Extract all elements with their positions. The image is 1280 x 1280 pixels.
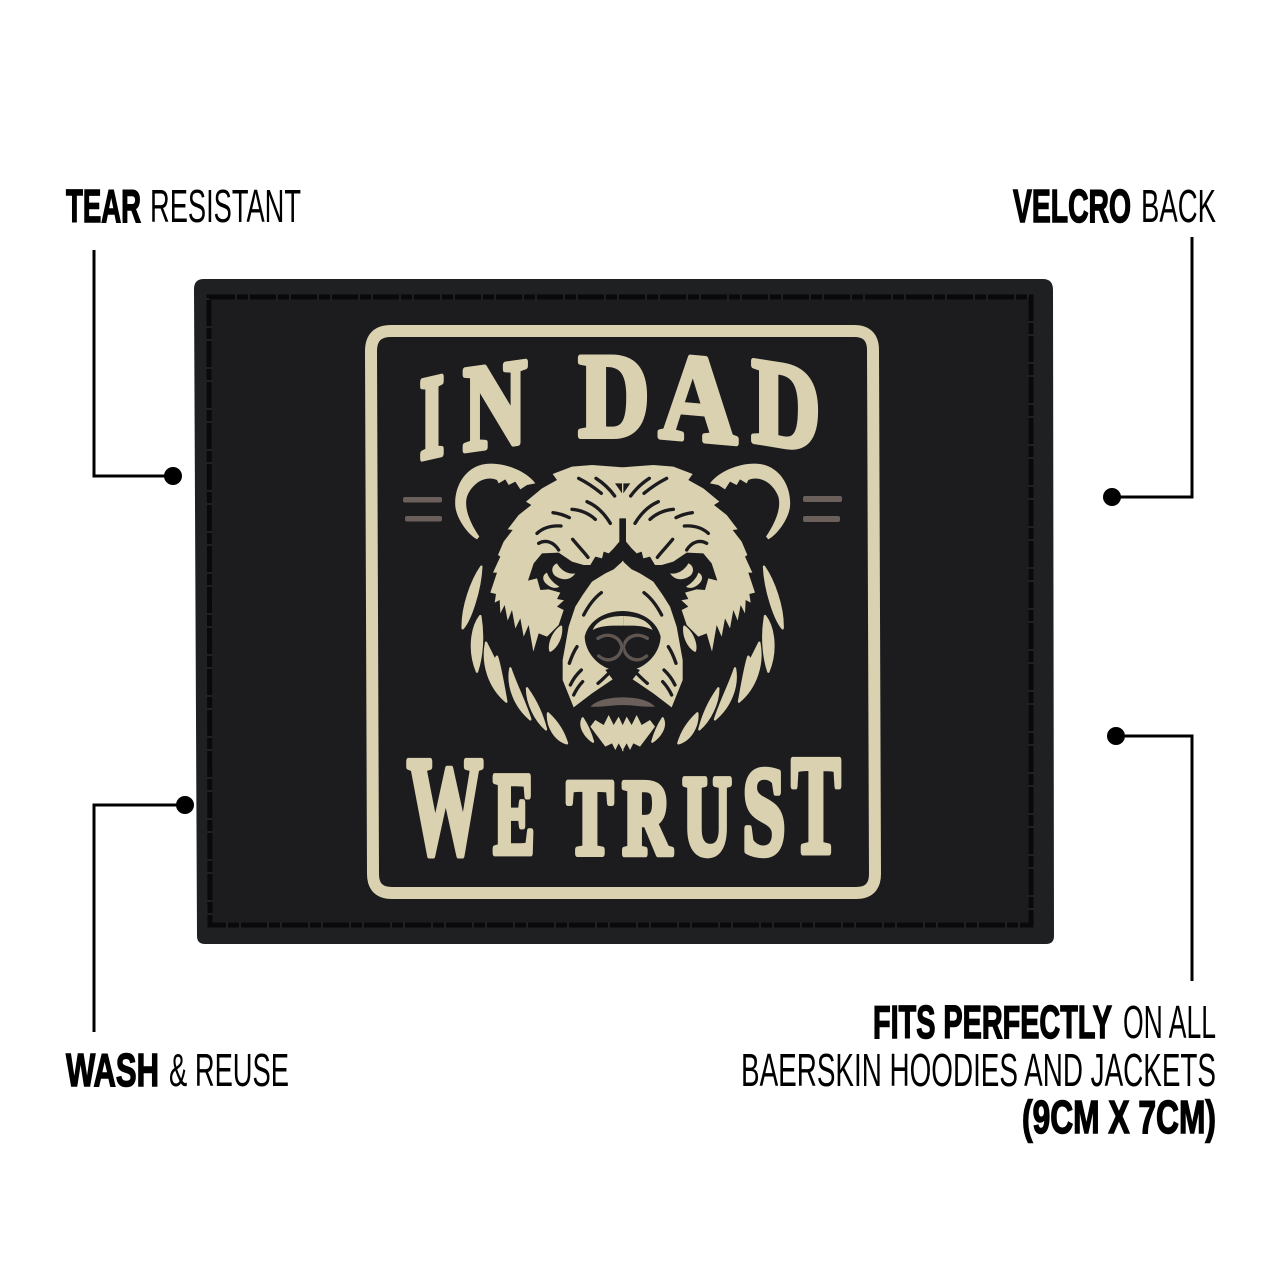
heading: WE TRUST: W <box>407 730 483 884</box>
callout: tear resistant: RESISTANT <box>150 180 301 232</box>
heading: WE TRUST <box>407 728 841 884</box>
heading: IN DAD <box>420 327 820 485</box>
callout: fits perfectly: FITS PERFECTLY <box>873 996 1112 1048</box>
heading: IN DAD: I <box>420 350 444 485</box>
leader line: wash and reuse <box>94 796 194 1032</box>
stitching border <box>209 297 1031 925</box>
callout: wash and reuse <box>66 1044 289 1096</box>
leader line: velcro back <box>1103 237 1192 506</box>
heading: IN DAD: D <box>579 329 649 462</box>
patch inner field <box>212 300 1028 922</box>
panel: PVC patch <box>194 279 1054 944</box>
patch base <box>194 279 1054 944</box>
callout: velcro back: VELCRO <box>1013 180 1131 232</box>
callout: wash and reuse: & REUSE <box>169 1044 289 1096</box>
leader line: tear resistant <box>94 250 182 485</box>
heading: IN DAD: D <box>752 332 820 478</box>
callout: tear resistant <box>66 180 301 232</box>
heading: WE TRUST: R <box>622 758 672 878</box>
callout: fits perfectly: ON ALL <box>1123 996 1216 1048</box>
right side marks <box>803 496 842 522</box>
leader line: fits perfectly <box>1107 727 1192 981</box>
icon: bear head <box>455 464 790 752</box>
heading: WE TRUST: U <box>682 755 732 879</box>
heading: WE TRUST: T <box>791 728 841 883</box>
callout: wash and reuse: WASH <box>66 1044 159 1096</box>
left side marks <box>403 497 442 522</box>
heading: WE TRUST: T <box>567 758 613 878</box>
cream frame <box>371 331 875 893</box>
callout: velcro back: BACK <box>1141 180 1216 232</box>
callout: tear resistant: TEAR <box>66 180 141 232</box>
callout: fits perfectly <box>741 996 1216 1143</box>
heading: WE TRUST: S <box>742 742 786 882</box>
heading: IN DAD: N <box>463 334 527 478</box>
heading: IN DAD: A <box>659 327 737 471</box>
heading: WE TRUST: E <box>493 751 535 879</box>
